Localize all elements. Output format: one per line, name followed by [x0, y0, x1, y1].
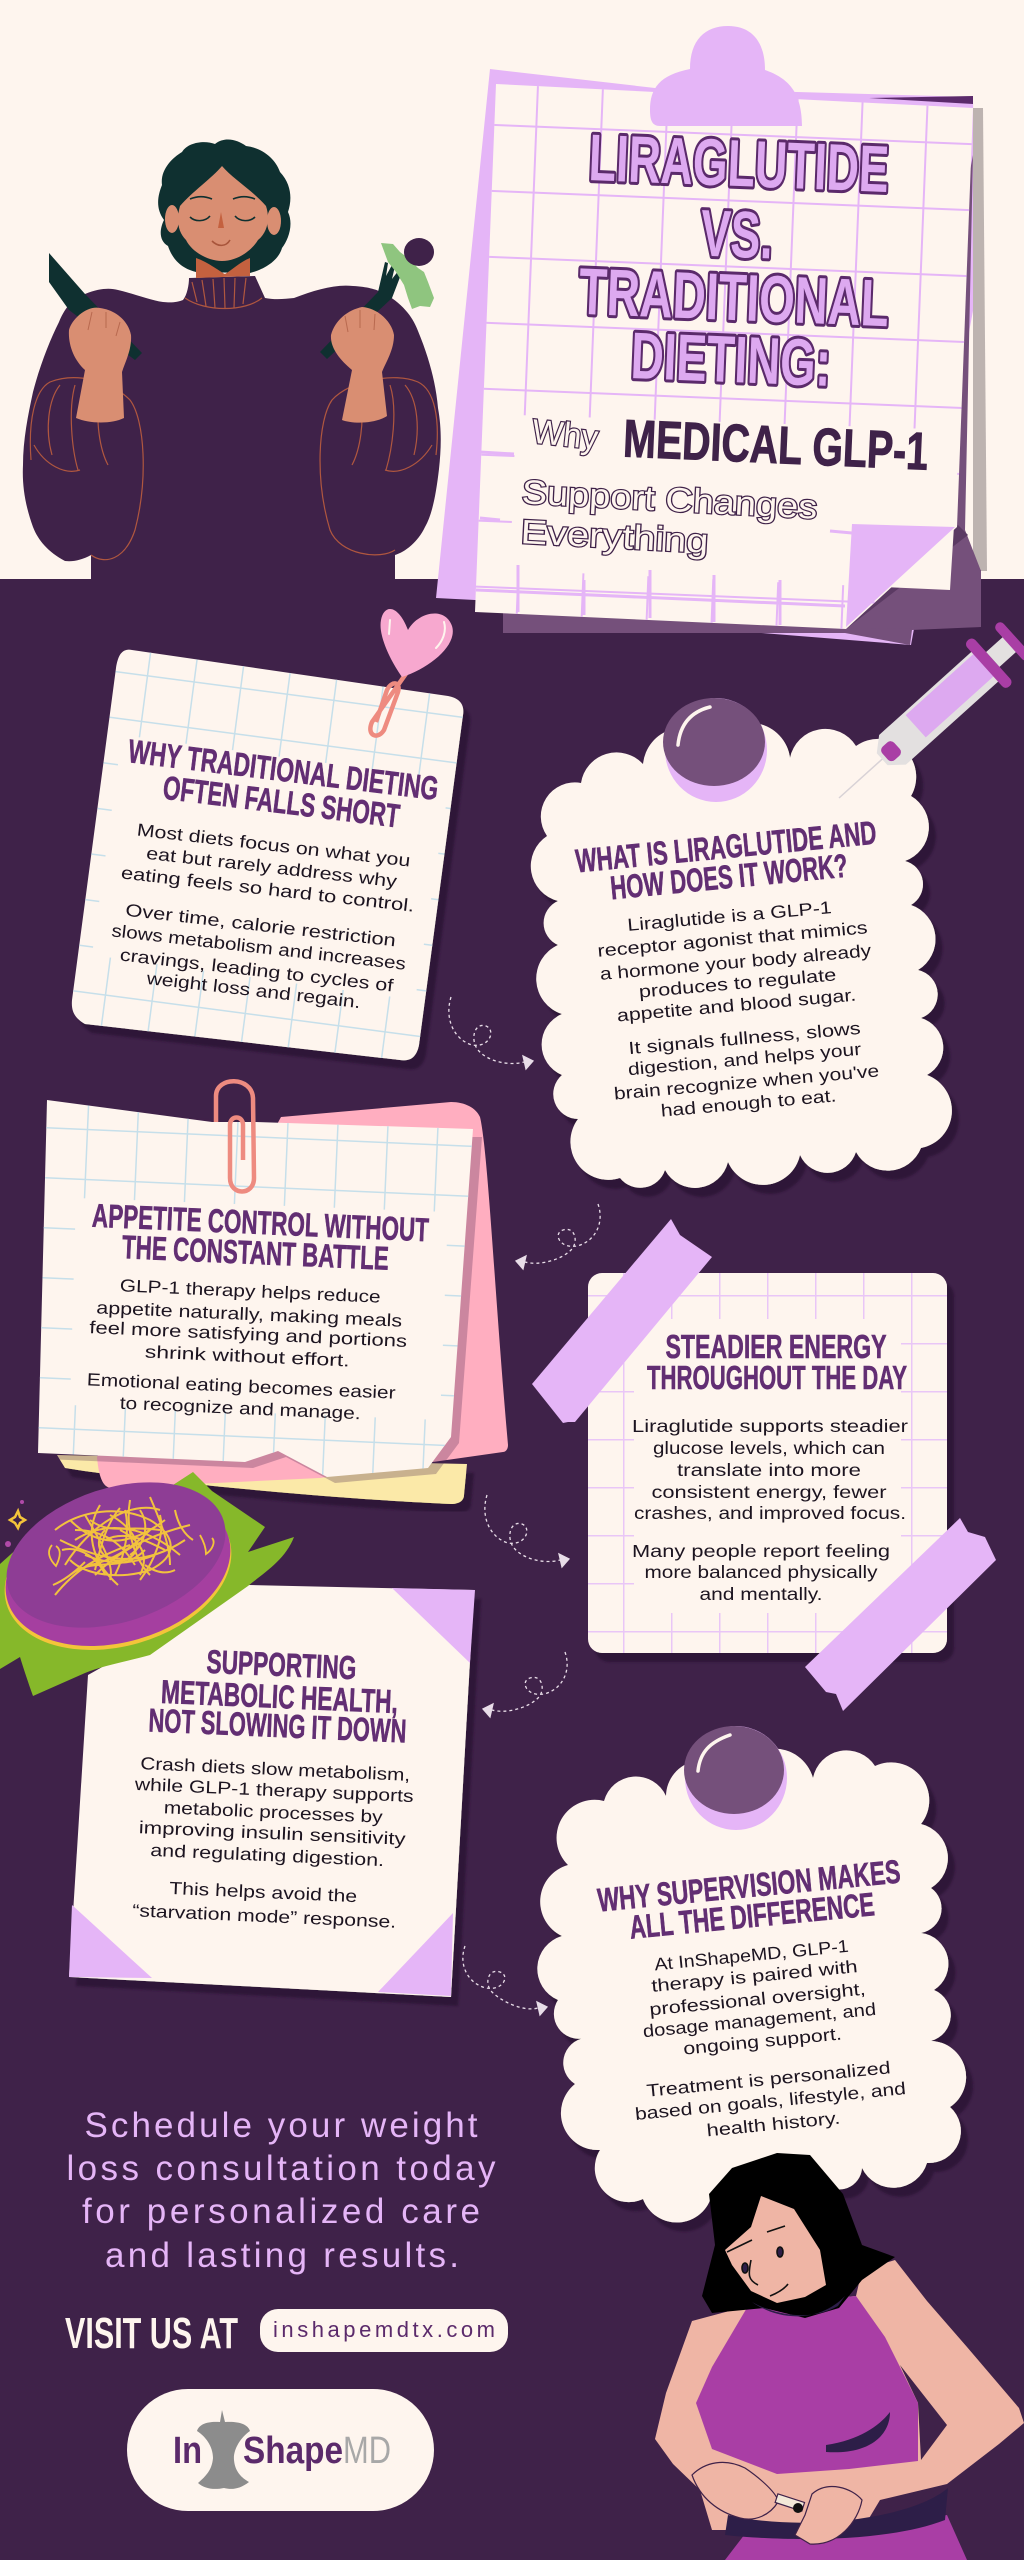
- note paper: [72, 650, 463, 1060]
- pen cap: [793, 2503, 803, 2513]
- body text: brain recognize when you've: [613, 1060, 880, 1104]
- sprinkle dots: [5, 1500, 24, 1547]
- subtitle: Why medical GLP-1: MEDICAL GLP-1: [622, 409, 929, 482]
- heading: [126, 732, 440, 834]
- hand left: [69, 308, 131, 422]
- facial features: [727, 2226, 788, 2296]
- lettuce: [381, 243, 434, 309]
- body text: receptor agonist that mimics: [597, 917, 869, 961]
- pants: [725, 2515, 967, 2560]
- dark under sheet: [503, 570, 981, 645]
- body text: [634, 1936, 907, 2140]
- illustration: woman injecting GLP-1 pen: [655, 2153, 1024, 2560]
- body text: Liraglutide is a GLP-1: [626, 897, 832, 935]
- paper shadow on back notes: [46, 1108, 482, 1483]
- grid: [588, 1273, 947, 1653]
- background: dark plum body: [0, 579, 1024, 2560]
- title: Liraglutide vs traditional dieting: DIETING:: [630, 318, 832, 400]
- subtitle: support changes everything: Support Changes: [521, 473, 818, 527]
- page side shadow: [973, 108, 987, 571]
- paper stack, lilac back: [436, 69, 975, 645]
- website pill: [260, 2309, 508, 2352]
- body text: Crash diets slow metabolism,: [140, 1753, 411, 1785]
- icon: paperclip: [370, 668, 410, 736]
- text mask: [92, 735, 450, 1000]
- corner fold bottom left: [69, 1905, 152, 1978]
- heading: WHY TRADITIONAL DIETING: [126, 732, 440, 807]
- call to action text: [66, 2106, 496, 2275]
- text mask: [510, 415, 960, 590]
- panel: why supervision: [537, 1726, 966, 2226]
- body text: and regulating digestion.: [150, 1840, 385, 1870]
- shredded topping: [53, 1497, 193, 1595]
- body text: improving insulin sensitivity: [138, 1817, 406, 1849]
- icon: syringe: [818, 615, 1024, 821]
- logo: InShapeMD: [127, 2389, 434, 2511]
- heading: [91, 1197, 430, 1277]
- heading: THROUGHOUT THE DAY: [647, 1359, 907, 1396]
- heading: OFTEN FALLS SHORT: [161, 769, 402, 834]
- illustration: woman with knife and fork: [23, 140, 441, 580]
- arrow: to metabolic panel: [483, 1652, 567, 1717]
- body text: and mentally.: [700, 1584, 822, 1604]
- subtitle: support changes everything: Everything: [520, 513, 709, 561]
- neck: [196, 258, 250, 278]
- panel: what is liraglutide: [531, 615, 1024, 1188]
- body text: At InShapeMD, GLP-1: [653, 1936, 849, 1974]
- heading: SUPPORTING: [206, 1643, 357, 1686]
- illustration: purple cake on leaf: [0, 1456, 294, 1696]
- topping hearts: [49, 1535, 214, 1566]
- grid: [38, 1100, 473, 1477]
- body text: “starvation mode” response.: [132, 1900, 397, 1932]
- icon: paperclip: [216, 1081, 254, 1192]
- body text: [132, 1753, 414, 1932]
- body text: translate into more: [677, 1460, 861, 1480]
- body text: slows metabolism and increases: [110, 920, 407, 974]
- heading: [596, 1853, 902, 1946]
- body text: Emotional eating becomes easier: [86, 1369, 396, 1403]
- washi tape bottom: [805, 1518, 996, 1711]
- corner fold bottom right: [378, 1913, 453, 1996]
- body text: a hormone your body already: [599, 940, 872, 984]
- cake rim: [0, 1469, 250, 1675]
- call to action text: and lasting results.: [105, 2236, 459, 2275]
- subtitle: Why medical GLP-1: [530, 409, 929, 482]
- body text: GLP-1 therapy helps reduce: [119, 1275, 381, 1307]
- body text: This helps avoid the: [169, 1878, 358, 1906]
- scalloped card: [537, 1749, 966, 2226]
- body text: Most diets focus on what you: [136, 820, 411, 871]
- hand right: [331, 307, 394, 423]
- background: cream header band: [0, 0, 1024, 579]
- icon: sparkle: [10, 1511, 25, 1528]
- grid: [72, 650, 463, 1060]
- body text: [632, 1416, 908, 1604]
- heading: THE CONSTANT BATTLE: [121, 1228, 390, 1277]
- hands with pen: [692, 2462, 862, 2544]
- note paper: [69, 1585, 474, 1997]
- body text: more balanced physically: [644, 1562, 878, 1582]
- heading: NOT SLOWING IT DOWN: [148, 1701, 407, 1750]
- body text: consistent energy, fewer: [652, 1482, 887, 1502]
- body text: health history.: [706, 2108, 841, 2140]
- body text: [110, 820, 415, 1012]
- body text: glucose levels, which can: [653, 1438, 885, 1458]
- purple tank top: [696, 2296, 918, 2474]
- body text: weight loss and regain.: [145, 968, 362, 1012]
- body text: [86, 1275, 408, 1423]
- panel: steadier energy: [532, 1219, 996, 1711]
- sheet grid: [475, 84, 973, 629]
- scalloped card: [531, 723, 952, 1188]
- title: Liraglutide vs traditional dieting: VS.: [699, 196, 774, 272]
- nose: [218, 212, 224, 228]
- heading: ALL THE DIFFERENCE: [628, 1885, 876, 1946]
- body text: Treatment is personalized: [646, 2057, 891, 2101]
- website pill: inshapemdtx.com: [273, 2317, 495, 2342]
- apple core icon: [197, 2410, 250, 2489]
- icon: bead pin: [663, 698, 767, 802]
- lower grid lines: [476, 452, 852, 625]
- corner fold top right: [392, 1588, 475, 1663]
- body text: professional oversight,: [648, 1979, 866, 2019]
- body text: It signals fullness, slows: [628, 1018, 862, 1058]
- heading: STEADIER ENERGY: [666, 1328, 886, 1365]
- arrow: to liraglutide panel: [449, 997, 533, 1069]
- face: [725, 2196, 826, 2303]
- note card: [588, 1273, 947, 1653]
- body text: Liraglutide supports steadier: [632, 1416, 908, 1436]
- arm gap: [900, 2365, 947, 2460]
- logo wordmark Shape: Shape: [243, 2430, 343, 2472]
- heading: APPETITE CONTROL WITHOUT: [91, 1197, 430, 1248]
- body text: appetite naturally, making meals: [96, 1297, 403, 1331]
- text mask: [70, 1198, 448, 1420]
- body text: had enough to eat.: [660, 1085, 837, 1121]
- body text: cravings, leading to cycles of: [119, 945, 395, 996]
- icon: bead pin: [684, 1726, 787, 1830]
- yellow back note: [57, 1455, 467, 1504]
- collar: [752, 2296, 845, 2316]
- ears: [165, 205, 281, 235]
- heading: [574, 814, 878, 906]
- main paper: [38, 1100, 473, 1477]
- cake side: [0, 1467, 249, 1671]
- body text: eating feels so hard to control.: [120, 862, 415, 916]
- heading: HOW DOES IT WORK?: [609, 847, 849, 906]
- body text: to recognize and manage.: [119, 1393, 361, 1423]
- dark top sliver: [869, 96, 973, 104]
- subtitle: Why medical GLP-1: Why: [530, 413, 600, 457]
- body text: shrink without effort.: [144, 1342, 350, 1370]
- body text: digestion, and helps your: [627, 1039, 862, 1079]
- body text: eat but rarely address why: [145, 843, 398, 891]
- arrow: to appetite panel: [516, 1204, 600, 1269]
- heading: [647, 1328, 907, 1396]
- call to action text: for personalized care: [82, 2192, 480, 2231]
- logo wordmark In: In: [173, 2430, 202, 2472]
- panel: why traditional dieting falls short: [72, 609, 463, 1060]
- hair: [702, 2153, 895, 2318]
- fork: [320, 262, 402, 359]
- pink back note: [97, 1102, 508, 1488]
- title: Liraglutide vs traditional dieting: [578, 120, 890, 400]
- clip: [650, 26, 802, 126]
- call to action text: Schedule your weight: [84, 2106, 478, 2145]
- top crease: [826, 2412, 890, 2452]
- visit us label: VISIT US AT: [65, 2309, 238, 2358]
- sweater: [23, 276, 441, 580]
- body text: ongoing support.: [682, 2023, 843, 2059]
- sleeve and collar lines: [30, 278, 437, 560]
- face: [178, 166, 268, 261]
- title: Liraglutide vs traditional dieting: LIRAGLUTIDE: [588, 120, 890, 206]
- heading: WHY SUPERVISION MAKES: [596, 1853, 902, 1919]
- hair: [158, 140, 290, 273]
- olive: [404, 238, 434, 266]
- leaf: [0, 1472, 294, 1696]
- knife: [49, 253, 142, 360]
- panel: appetite control: [38, 1081, 508, 1504]
- body text: metabolic processes by: [163, 1797, 383, 1827]
- cake top: [0, 1456, 244, 1654]
- body text: therapy is paired with: [650, 1956, 858, 1996]
- body text: based on goals, lifestyle, and: [634, 2078, 907, 2124]
- title: Liraglutide vs traditional dieting: TRADITIONAL: [578, 254, 890, 340]
- waistband: [725, 2488, 948, 2539]
- body text: crashes, and improved focus.: [634, 1503, 906, 1523]
- subtitle: support changes everything: [520, 473, 818, 561]
- facial features: [190, 197, 255, 245]
- arms and midriff: [655, 2260, 1024, 2530]
- body text: Over time, calorie restriction: [124, 900, 397, 950]
- washi tape top: [532, 1219, 712, 1423]
- icon: heart: [381, 609, 453, 677]
- body text: dosage management, and: [642, 1999, 877, 2041]
- body text: while GLP-1 therapy supports: [133, 1774, 414, 1806]
- heading: [148, 1643, 407, 1750]
- arrow: to steadier energy: [485, 1495, 569, 1567]
- panel: supporting metabolic health: [69, 1585, 475, 1997]
- panel: title note paper: [436, 26, 987, 645]
- cream sheet: [475, 84, 973, 629]
- body text: produces to regulate: [638, 964, 837, 1002]
- body text: feel more satisfying and portions: [89, 1317, 408, 1351]
- arrow: to supervision panel: [463, 1946, 547, 2015]
- page fold: [846, 524, 955, 627]
- call to action text: loss consultation today: [66, 2149, 496, 2188]
- heading: METABOLIC HEALTH,: [160, 1673, 399, 1720]
- text mask: [634, 1319, 901, 1613]
- finger lines: [88, 310, 375, 336]
- body text: Many people report feeling: [632, 1541, 890, 1561]
- fold shadow: [846, 155, 981, 629]
- body text: [597, 897, 880, 1121]
- logo wordmark MD: MD: [343, 2430, 391, 2472]
- body text: appetite and blood sugar.: [616, 985, 857, 1025]
- heading: WHAT IS LIRAGLUTIDE AND: [574, 814, 878, 879]
